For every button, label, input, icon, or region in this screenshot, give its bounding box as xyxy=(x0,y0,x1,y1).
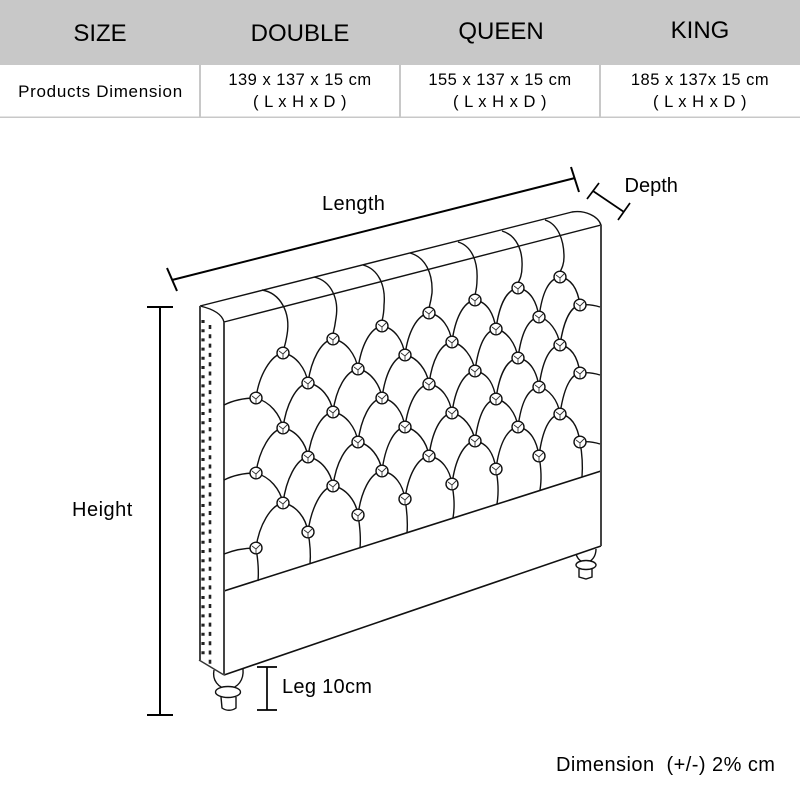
table header band: SIZE xyxy=(73,20,127,47)
lower vertical pleats xyxy=(256,442,582,581)
front left leg xyxy=(214,669,243,710)
table dimensions row: ( L x H x D ) xyxy=(253,93,347,111)
table header band: QUEEN xyxy=(458,18,544,45)
table header band: KING xyxy=(671,17,729,44)
table dimensions row: 139 x 137 x 15 cm xyxy=(228,71,372,89)
table header band: DOUBLE xyxy=(251,20,349,47)
leg dimension arrow xyxy=(257,667,277,710)
table dimensions row: Products Dimension xyxy=(18,82,183,101)
table header band xyxy=(0,0,800,65)
table dimensions row: ( L x H x D ) xyxy=(653,93,747,111)
diamond tufting arches xyxy=(224,277,600,554)
depth dimension arrow xyxy=(587,183,630,220)
back right leg xyxy=(576,549,596,579)
height label: Height xyxy=(72,499,133,521)
headboard drawing xyxy=(199,212,601,710)
tufting buttons xyxy=(250,271,586,554)
height dimension arrow xyxy=(147,307,173,715)
size table xyxy=(0,0,800,118)
depth label: Depth xyxy=(624,175,678,197)
side nail dots xyxy=(203,320,210,668)
length label: Length xyxy=(322,193,385,215)
table dimensions row xyxy=(0,64,800,118)
tolerance note: Dimension (+/-) 2% cm xyxy=(556,754,775,776)
table dimensions row: 185 x 137x 15 cm xyxy=(631,71,769,89)
top seam stitching xyxy=(262,220,564,348)
table dimensions row: 155 x 137 x 15 cm xyxy=(428,71,572,89)
length dimension arrow xyxy=(167,167,579,291)
leg label: Leg 10cm xyxy=(282,676,372,698)
table dimensions row: ( L x H x D ) xyxy=(453,93,547,111)
headboard outline xyxy=(199,212,601,675)
